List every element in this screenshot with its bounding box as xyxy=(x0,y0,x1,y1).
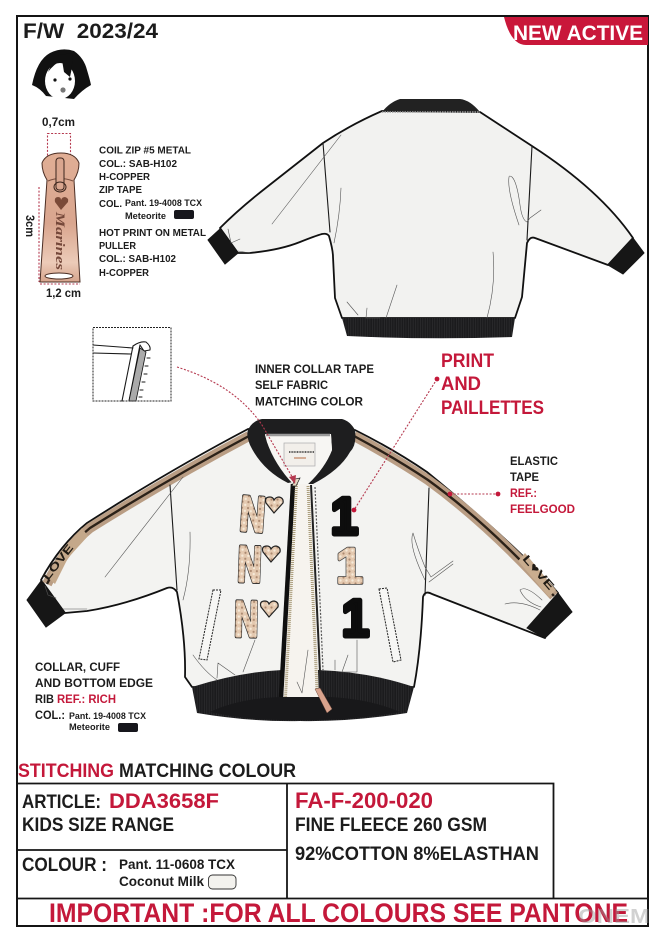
important pantone banner: IMPORTANT :FOR ALL COLOURS SEE PANTONE xyxy=(49,898,628,928)
stitching note: STITCHING xyxy=(18,761,114,782)
season title: F/W 2023/24 xyxy=(23,20,158,43)
N and heart prints: N xyxy=(238,487,267,543)
stitching note: MATCHING COLOUR xyxy=(119,761,296,782)
zip specification text: ZIP TAPE xyxy=(99,184,142,196)
label: print and paillettes: AND xyxy=(441,374,481,395)
zip specification text: H-COPPER xyxy=(99,267,149,279)
label: print and paillettes: PRINT xyxy=(441,351,494,372)
centre opening and zip xyxy=(281,478,323,697)
zip specification text: COL.: SAB-H102 xyxy=(99,253,176,265)
label: elastic tape: ELASTIC xyxy=(510,454,558,468)
seams and folds xyxy=(45,477,542,680)
N and heart prints: N xyxy=(237,536,263,593)
zip specification text: PULLER xyxy=(99,240,136,252)
label: inner collar tape xyxy=(255,362,374,408)
zip specification text: Meteorite xyxy=(125,211,166,221)
article block: DDA3658F xyxy=(109,790,219,813)
label: inner collar tape: MATCHING COLOR xyxy=(255,394,363,408)
article block: KIDS SIZE RANGE xyxy=(22,815,174,836)
zip specification text xyxy=(99,144,207,279)
label: inner collar tape: SELF FABRIC xyxy=(255,378,328,392)
article block xyxy=(22,790,219,836)
zip puller dimensions and drawing: Marines xyxy=(53,211,68,270)
label: collar, cuff and bottom edge rib: AND BOTTOM EDGE xyxy=(35,676,153,690)
inset: inner collar tape detail xyxy=(93,328,171,401)
N and heart prints: N xyxy=(234,591,259,647)
label: elastic tape: FEELGOOD xyxy=(510,502,575,516)
label: elastic tape: REF.: xyxy=(510,486,537,500)
zip specification text: Pant. 19-4008 TCX xyxy=(125,198,202,208)
cuffs xyxy=(27,581,65,627)
label: collar, cuff and bottom edge rib: RIB xyxy=(35,692,54,706)
N and heart prints xyxy=(234,487,283,647)
zip specification text: H-COPPER xyxy=(99,171,150,183)
label: elastic tape: TAPE xyxy=(510,470,539,484)
fabric block: FA-F-200-020 xyxy=(295,788,433,813)
front view jacket xyxy=(27,419,572,721)
fabric block: 92%COTTON 8%ELASTHAN xyxy=(295,844,539,865)
zip puller dimensions and drawing: 1,2 cm xyxy=(46,286,81,300)
new active tag: NEW ACTIVE xyxy=(513,22,643,45)
label: collar, cuff and bottom edge rib: REF.: RICH xyxy=(57,692,116,706)
zip specification text: COL. xyxy=(99,198,122,210)
right sleeve tape: L♥VE xyxy=(520,553,556,593)
zip puller on jacket xyxy=(315,688,332,713)
label: collar, cuff and bottom edge rib: COL.: xyxy=(35,708,65,722)
fabric block xyxy=(295,788,539,865)
collar xyxy=(247,419,355,484)
jacket body xyxy=(41,429,558,687)
left pocket xyxy=(199,590,221,660)
leader line: print and paillettes xyxy=(352,377,439,512)
leader line: inner collar tape xyxy=(177,367,296,484)
zip specification text: HOT PRINT ON METAL xyxy=(99,227,207,239)
number 1 prints: 1 xyxy=(336,538,363,594)
article table xyxy=(18,784,648,898)
label: print and paillettes xyxy=(441,351,544,419)
zip puller dimensions and drawing: 0,7cm xyxy=(42,115,75,129)
colour block: COLOUR : xyxy=(22,855,107,876)
label: collar, cuff and bottom edge rib: Meteorite xyxy=(69,722,110,732)
left sleeve tape xyxy=(41,436,249,584)
label: elastic tape xyxy=(510,454,575,516)
zip puller dimensions and drawing xyxy=(23,115,81,300)
watermark: ONEM xyxy=(578,906,650,928)
number 1 prints: 1 xyxy=(336,538,363,594)
left sleeve tape: LOVE xyxy=(41,542,76,583)
colour block: Pant. 11-0608 TCX xyxy=(119,856,236,872)
leader line: elastic tape xyxy=(448,492,500,496)
icon: girl face logo xyxy=(32,49,91,99)
zip specification text: COIL ZIP #5 METAL xyxy=(99,144,192,156)
label: collar, cuff and bottom edge rib: Pant. 19-4008 TCX xyxy=(69,711,146,721)
label: collar, cuff and bottom edge rib xyxy=(35,660,153,732)
number 1 prints: 1 xyxy=(342,590,369,648)
zip specification text: COL.: SAB-H102 xyxy=(99,158,177,170)
number 1 prints: 1 xyxy=(331,488,358,546)
label: inner collar tape: INNER COLLAR TAPE xyxy=(255,362,374,376)
article block: ARTICLE: xyxy=(22,792,101,813)
N and heart prints: N xyxy=(238,487,267,543)
colour block: Coconut Milk xyxy=(119,873,204,889)
number 1 prints xyxy=(331,488,369,648)
N and heart prints: N xyxy=(234,591,259,647)
label: print and paillettes: PAILLETTES xyxy=(441,398,544,419)
zip puller dimensions and drawing: 3cm xyxy=(23,215,37,237)
colour block xyxy=(22,855,236,889)
stitching note xyxy=(18,761,296,782)
back view jacket xyxy=(208,99,644,338)
label: collar, cuff and bottom edge rib: COLLAR, CUFF xyxy=(35,660,120,674)
fabric block: FINE FLEECE 260 GSM xyxy=(295,815,487,836)
bottom rib hem xyxy=(192,670,414,721)
right sleeve tape xyxy=(354,436,556,597)
right pocket xyxy=(379,588,401,662)
N and heart prints: N xyxy=(237,536,263,593)
